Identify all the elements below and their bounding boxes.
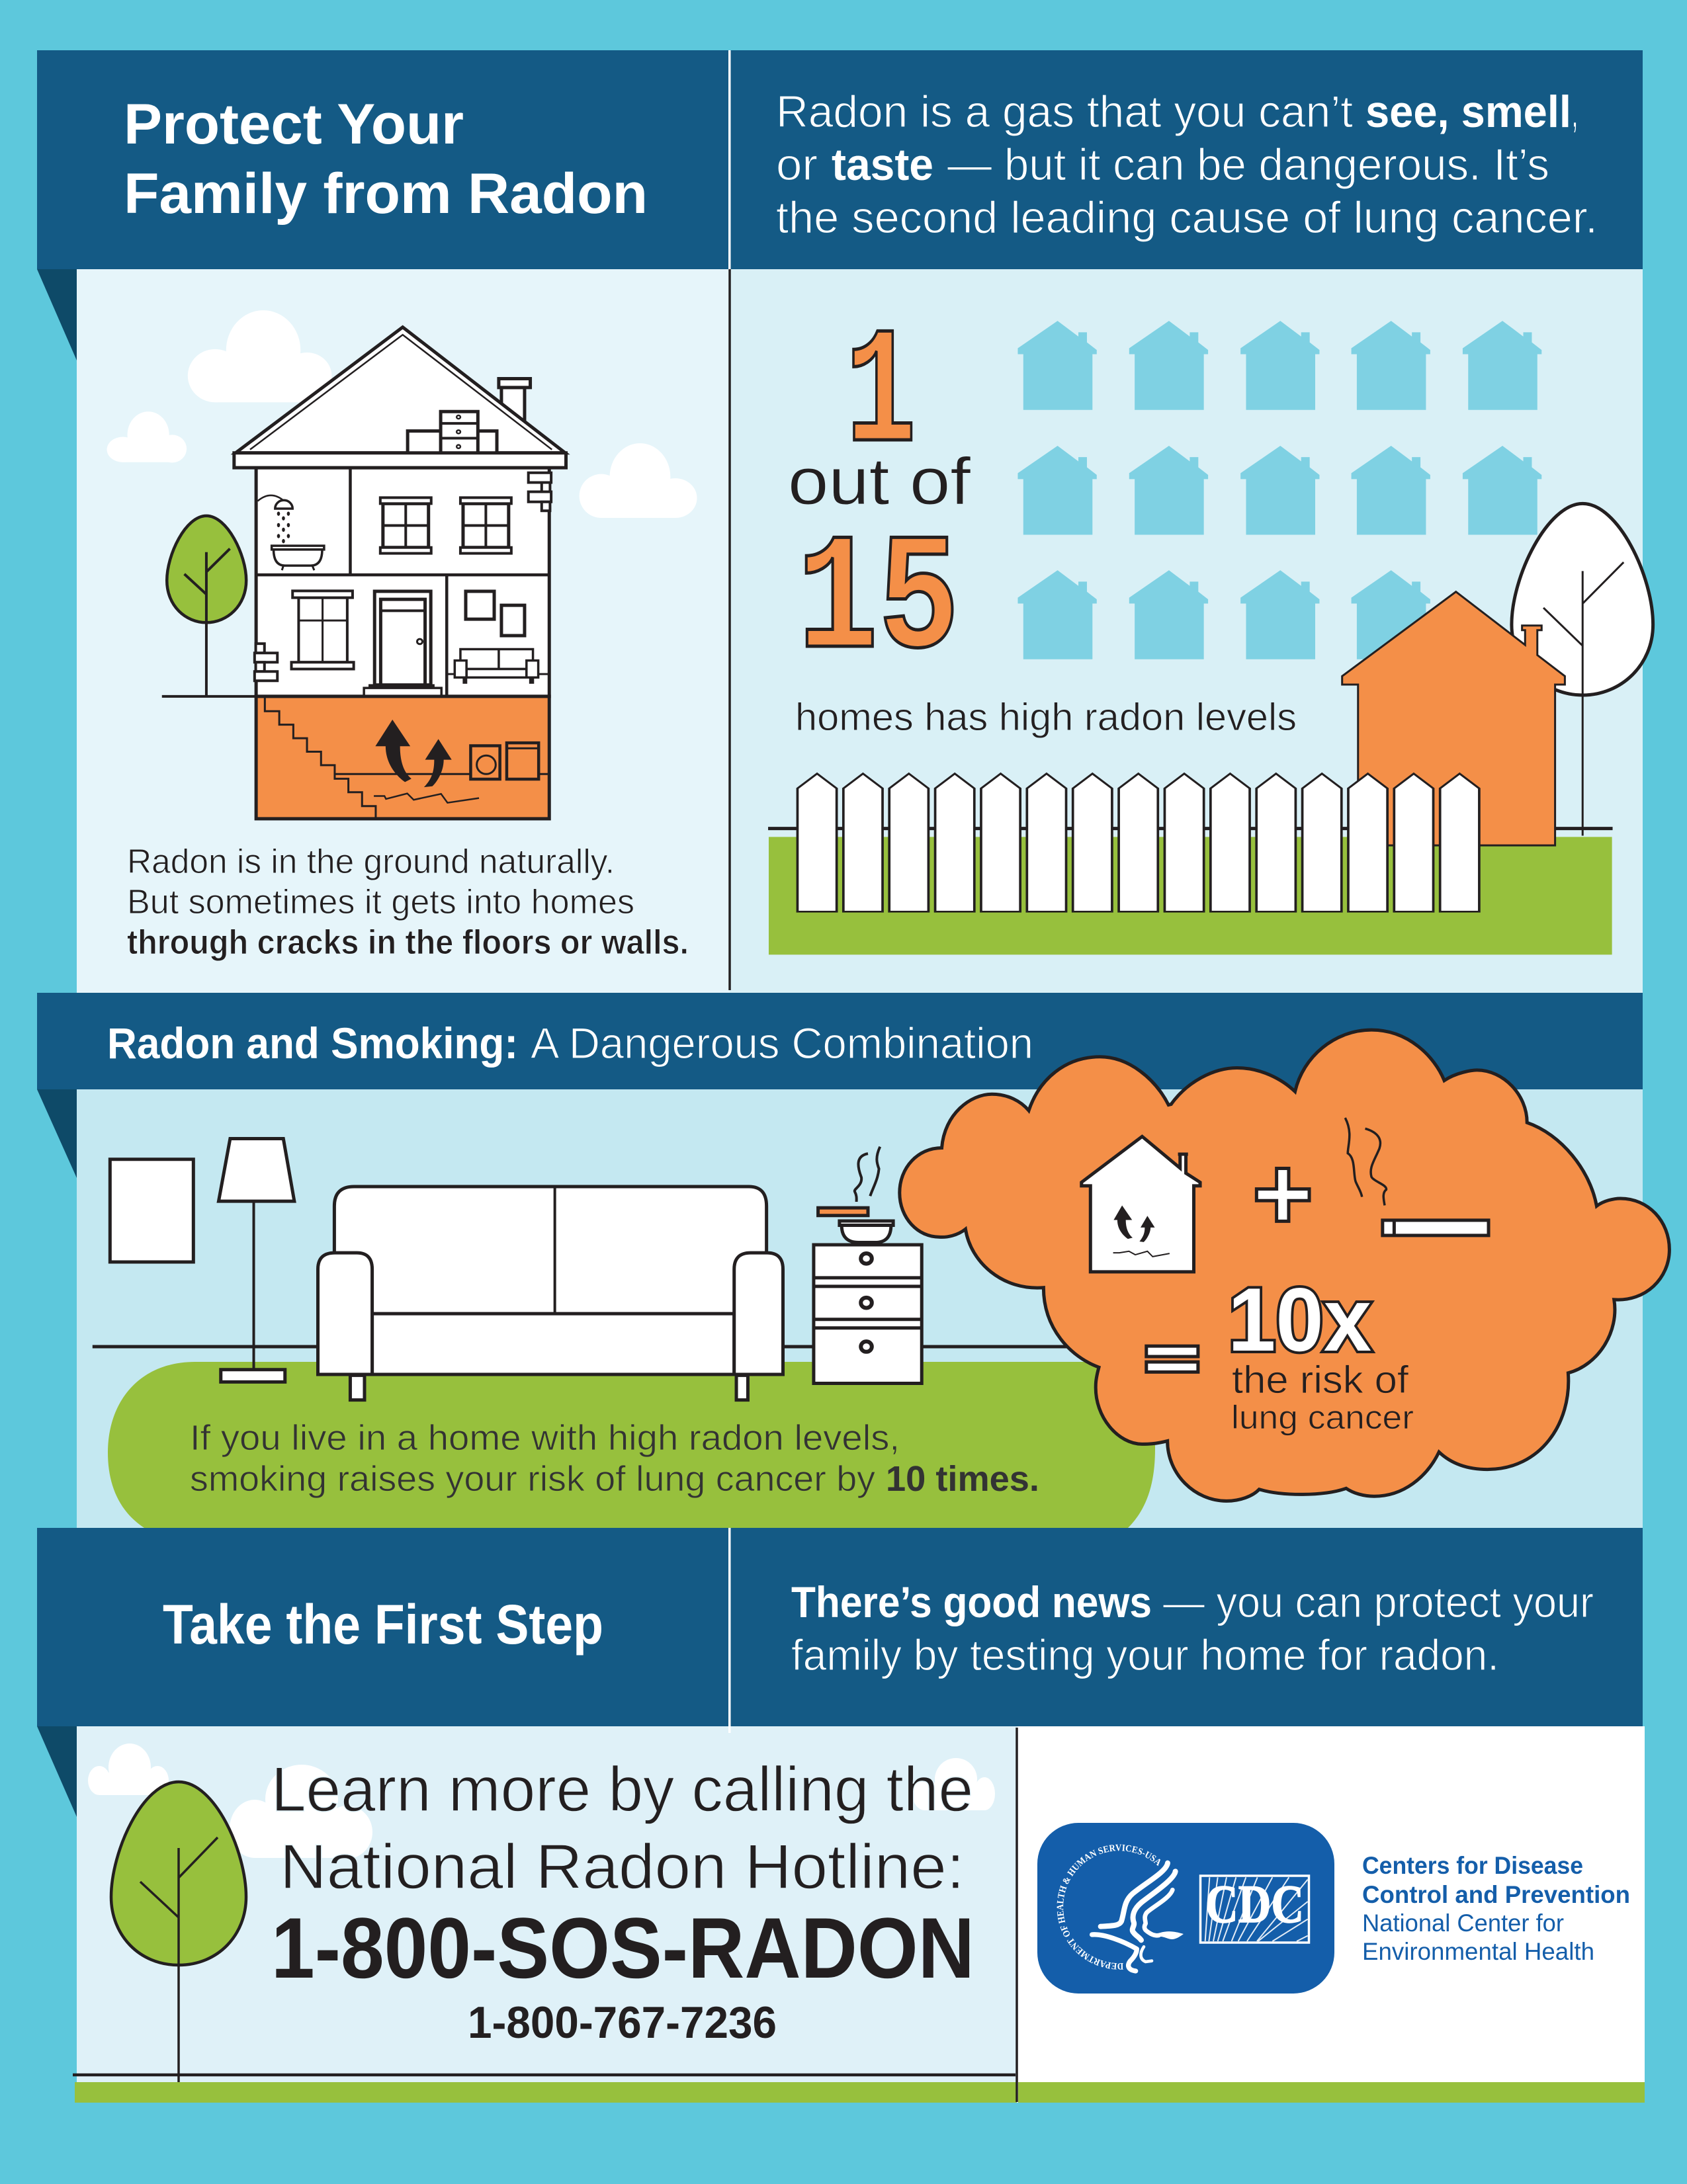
text: hotline: [271, 1754, 974, 2048]
icon: hotline tree: [111, 1782, 246, 2082]
text: hotline: 1-800-767-7236: [468, 1997, 777, 2048]
fold: top ribbon: [37, 269, 77, 360]
eagle: [1092, 1863, 1184, 1971]
text: smoking risk: smoking raises your risk of lung cancer by: [190, 1459, 875, 1499]
statistic: 1 out of 15: 1: [845, 303, 916, 490]
logo: HHS and CDC: [1037, 1823, 1334, 1994]
header band: take the first step: Take the First Step: [163, 1593, 603, 1656]
text: homes has high radon levels: homes has high radon levels: [795, 696, 1297, 739]
text: radon intro: — but it can be dangerous. It’s: [947, 140, 1549, 190]
statistic: 10x the risk of lung cancer: 10x: [1228, 1269, 1371, 1370]
text: smoking risk: 10 times.: [886, 1459, 1039, 1499]
illustration: living room: [93, 1139, 1070, 1400]
heading: protect your family from radon: [124, 93, 648, 226]
text: radon intro: ,: [1571, 87, 1579, 137]
icon: house with radon: [1082, 1136, 1200, 1272]
callout: orange risk cloud: [900, 1030, 1669, 1501]
text: agency name: National Center for: [1362, 1910, 1564, 1937]
green strip under logo: [1018, 2082, 1645, 2103]
basement: [256, 696, 549, 819]
statistic: 10x the risk of lung cancer: lung cancer: [1231, 1399, 1414, 1436]
text: smoking risk: [190, 1418, 1039, 1499]
heading: protect your family from radon: Protect Your: [124, 93, 464, 156]
statistic: 1 out of 15: 15: [797, 509, 959, 696]
text: radon intro: [776, 87, 1598, 243]
text: radon in the ground: Radon is in the ground naturally.: [127, 843, 615, 881]
statistic: 1 out of 15: [788, 303, 971, 696]
icon: plus: [1256, 1169, 1309, 1221]
text: radon in the ground: But sometimes it gets into homes: [127, 883, 634, 921]
text: good news: family by testing your home for radon.: [791, 1630, 1499, 1679]
icon: hotline clouds: [88, 1743, 995, 1859]
statistic: 10x the risk of lung cancer: the risk of: [1232, 1359, 1409, 1402]
statistic: 1 out of 15: out of: [788, 444, 971, 519]
fold: bottom ribbon: [37, 1726, 77, 1817]
icon: clouds behind house: [107, 310, 697, 518]
panel: hotline background: [77, 1726, 1017, 2103]
text: good news: — you can protect your: [1163, 1577, 1594, 1626]
illustration: house cross-section: [234, 327, 566, 820]
header band: protect your family: [37, 50, 1643, 269]
text: agency name: [1362, 1852, 1630, 1965]
text: radon intro: or: [776, 140, 818, 190]
header band: radon and smoking: A Dangerous Combination: [531, 1019, 1033, 1068]
text: agency name: Environmental Health: [1362, 1938, 1594, 1965]
text: radon intro: taste: [832, 140, 933, 190]
panel: 1 out of 15 homes: [730, 269, 1653, 993]
icon: green tree: [162, 516, 256, 696]
grass and ground line: [73, 2075, 1017, 2103]
text: radon in the ground: [127, 843, 689, 962]
icon: equals: [1146, 1346, 1198, 1372]
CDC mark: CDC: [1205, 1874, 1304, 1934]
text: hotline: 1-800-SOS-RADON: [271, 1900, 974, 1996]
fold: middle ribbon: [37, 1089, 77, 1178]
green rug: [108, 1362, 1155, 1528]
seal text: DEPARTMENT OF HEALTH & HUMAN SERVICES-USA: [1057, 1844, 1160, 1970]
text: radon intro: see, smell: [1365, 87, 1571, 137]
text: good news: [791, 1577, 1594, 1679]
text: radon intro: the second leading cause of lung cancer.: [776, 192, 1598, 243]
icon grid: 14 blue houses: [1017, 321, 1541, 659]
illustration: white tree, orange house, fence and grass: [768, 503, 1653, 954]
divider: [1016, 1728, 1018, 2102]
statistic: 10x the risk of lung cancer: [1228, 1269, 1414, 1436]
panel: smoking room background: [77, 1089, 1643, 1528]
text: good news: There’s good news: [791, 1577, 1152, 1626]
text: radon intro: Radon is a gas that you can’t: [776, 87, 1353, 137]
header band: radon and smoking: Radon and Smoking:: [107, 1019, 518, 1068]
header band: radon and smoking: [37, 993, 1643, 1089]
text: hotline: Learn more by calling the: [271, 1754, 973, 1825]
text: smoking risk: If you live in a home with high radon levels,: [190, 1418, 900, 1458]
text: hotline: National Radon Hotline:: [280, 1831, 965, 1902]
header band: take the first step: [37, 1528, 1643, 1733]
icon: cigarette with smoke: [1345, 1118, 1489, 1236]
text: radon in the ground: through cracks in the floors or walls.: [127, 923, 689, 962]
panel: radon in the ground: [77, 269, 730, 993]
panel: logo background: [1017, 1726, 1645, 2103]
text: agency name: Centers for Disease: [1362, 1852, 1583, 1879]
text: agency name: Control and Prevention: [1362, 1881, 1630, 1908]
heading: protect your family from radon: Family from Radon: [124, 162, 648, 226]
